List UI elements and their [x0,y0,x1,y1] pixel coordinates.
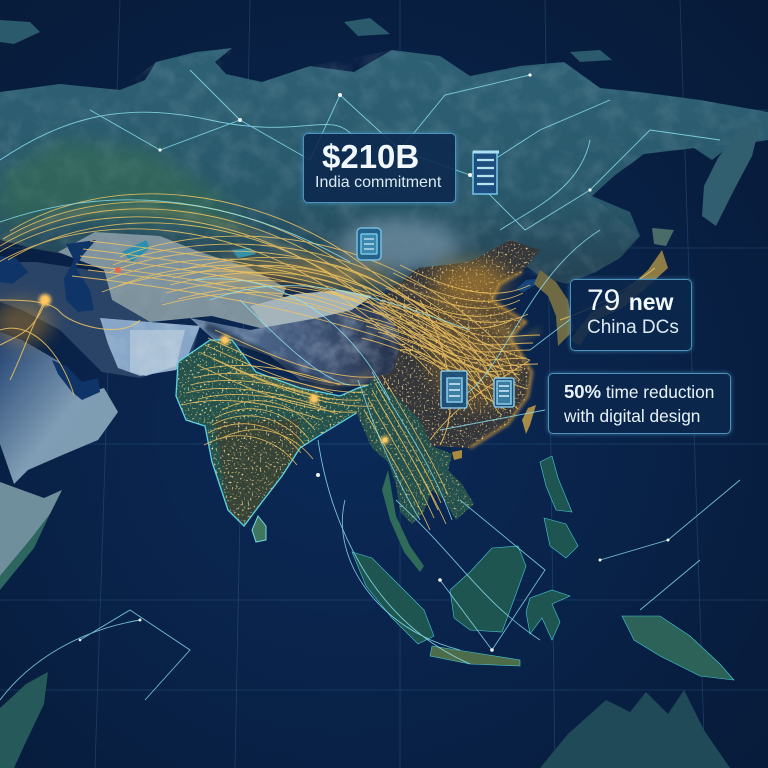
Tibetan plateau [190,300,404,387]
server icon: Mongolia [357,228,381,260]
server icon: north-east of callout [473,152,499,194]
Taklamakan desert [250,290,372,330]
Taiwan [522,405,536,434]
landmass: Australia [0,672,730,768]
network routes: gold [0,194,655,530]
server icon: central China right [494,378,514,407]
Hainan [452,450,462,460]
landmass: India [175,339,370,543]
landmass: Southeast Asia [356,378,474,572]
callout: 50% time reduction [548,373,731,434]
network routes: cyan [0,70,740,700]
callout text: 50% time reduction [564,381,714,402]
landmass: central Asia [0,232,286,378]
stat label: China DCs [587,317,679,338]
stat value: $210B [322,138,419,175]
network routes: glow [0,209,540,387]
callout text [564,381,714,426]
Caspian, Black and Persian Gulf waters [0,240,256,400]
landmass: China [372,240,540,460]
stat value: 79 new [587,284,673,317]
landmass: northern Asia [0,18,768,296]
server icon: central China left [441,371,467,408]
network nodes [39,73,670,652]
Korea and Japan [534,228,674,346]
landmass: Indonesia and Philippines [352,456,734,680]
callout text: with digital design [564,406,700,426]
warm haze [0,260,510,344]
callout: $210B India commitment [303,133,456,203]
landmass: Arabia and Africa [0,332,118,590]
Kamchatka peninsula [702,124,760,226]
callout: 79 new China DCs [570,279,692,351]
stat label: India commitment [315,174,441,191]
Arctic islands [0,18,612,62]
